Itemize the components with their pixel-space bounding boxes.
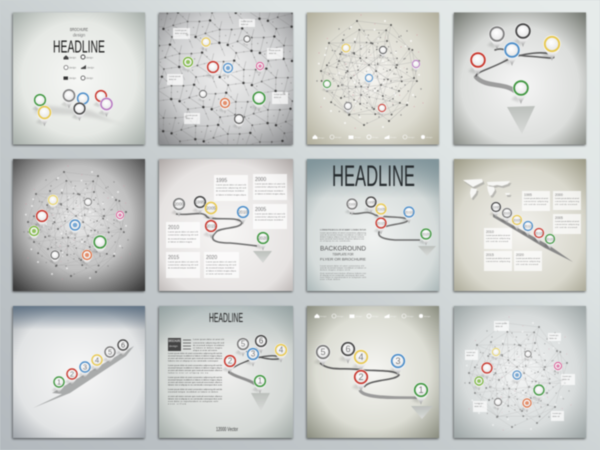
pins: 2005 <box>377 207 385 211</box>
pins: 1995 <box>492 205 500 209</box>
cards: 2020 <box>516 253 524 257</box>
article text: do eiusmod tempor incididunt <box>193 344 224 347</box>
heading: background template for flyer or brochure: FLYER OR BROCHURE <box>320 258 367 262</box>
article text: ut enim ad minim veniam quis nostrud exercitation ullamco <box>168 395 223 398</box>
text block: body: ut aliquip ex ea commodo consequat duis aute <box>320 274 365 277</box>
panel: headline flyer <box>307 159 439 291</box>
ribbon <box>320 363 417 398</box>
text cards <box>167 19 288 124</box>
pins: 2000 <box>174 201 184 207</box>
pins: 2020 <box>258 235 268 241</box>
pins <box>28 194 124 266</box>
pins: 2020 <box>422 232 430 236</box>
icon grid: design <box>69 77 77 80</box>
icon row: design <box>407 316 414 318</box>
network <box>309 13 433 134</box>
text cards: Lorem ips <box>562 376 571 378</box>
numbered pins: 6 <box>259 337 263 346</box>
icon grid: design <box>69 56 77 60</box>
icon row: design <box>335 137 342 139</box>
cards: 2010 <box>486 230 494 234</box>
cards: Lorem ipsum dolor sit amet <box>555 197 579 200</box>
text cards <box>465 321 575 421</box>
pins: 1995 <box>367 200 375 204</box>
cards: 1995 <box>216 178 227 184</box>
article text: Lorem ipsum dolor sit amet consectetur adipiscing elit sed do <box>168 364 223 367</box>
text cards: Lorem ipsum <box>496 323 507 325</box>
pins <box>473 348 562 412</box>
cards: Lorem ipsum dolor sit amet elit <box>206 260 236 264</box>
article text: Lorem ipsum dolor sit amet elit <box>193 338 224 341</box>
text cards: Lorem ips <box>474 403 483 405</box>
panel: light network with cards <box>454 306 586 438</box>
arrow <box>251 393 270 411</box>
arrow <box>507 106 535 134</box>
cards: 2015 <box>168 255 179 261</box>
cards: ut labore et dolore magna aliqua <box>216 194 247 196</box>
numbered pins <box>222 334 288 394</box>
article text: eiusmod tempor incididunt ut labore et dolore magna aliqua <box>168 378 223 382</box>
panel: rising numbered steps <box>13 306 145 438</box>
panel: beige network sphere <box>307 12 439 144</box>
article text: laboris nisi ut aliquip ex ea commodo consequat duis aute <box>168 398 223 400</box>
text: brochure design: design <box>73 32 86 38</box>
pins: 2010 <box>238 209 248 215</box>
pins: 2015 <box>377 221 385 225</box>
text cards: dolor sit <box>550 337 557 340</box>
numbered pins: 4 <box>358 352 364 362</box>
cards: Lorem ipsum dolor sit amet <box>555 220 579 223</box>
text cards: dolor sit <box>241 23 248 26</box>
text block: intro: ut aliquip ex ea commodo <box>320 240 351 242</box>
pins: 2020 <box>546 237 554 241</box>
article text: Lorem ipsum dolor sit amet consectetur adipiscing elit sed do <box>168 388 223 391</box>
article text: irure dolor in reprehenderit in voluptate velit <box>168 400 218 403</box>
cards: 2010 <box>168 225 179 231</box>
cards: do eiusmod tempor incididunt <box>168 266 196 270</box>
cards: elit sed do eiusmod <box>555 226 577 229</box>
text cards: dolor sit <box>269 52 276 55</box>
cards: ut labore et dolore magna aliqua <box>255 192 286 196</box>
pins <box>345 196 432 246</box>
icon row: design <box>426 137 433 139</box>
numbered pins: 3 <box>251 350 255 359</box>
icon row: design <box>320 316 327 318</box>
cards: do eiusmod tempor incididunt <box>216 190 244 192</box>
article text: ut enim ad minim veniam quis nostrud exercitation ullamco <box>168 357 223 360</box>
icon row <box>314 314 431 318</box>
article text: esse cillum <box>168 404 186 406</box>
cards: consectetur adipiscing <box>486 260 510 263</box>
numbered pins: 4 <box>279 346 284 355</box>
text cards: dolor sit <box>552 415 560 418</box>
pins: 2015 <box>206 223 216 229</box>
cards: 2005 <box>255 207 266 213</box>
article text <box>168 338 225 406</box>
text cards: dolor sit <box>274 96 281 99</box>
text cards: Lorem ips <box>552 413 561 415</box>
numbered pins <box>314 341 429 405</box>
text cards: Lorem ips <box>550 335 558 337</box>
pins <box>182 35 266 130</box>
icon grid: design <box>69 66 77 70</box>
cards: consectetur adipiscing elit sed <box>168 264 198 266</box>
panel: numbered pins with ribbon <box>307 306 439 438</box>
cards: consectetur adipiscing elit sed <box>255 186 285 188</box>
text block: body: esse cillum dolore <box>320 279 341 281</box>
cards: consectetur adipiscing <box>555 223 579 226</box>
text block: body: Lorem ipsum dolor sit amet consectetur elit <box>320 264 364 268</box>
text cards: Lorem ipsum <box>269 50 281 52</box>
title: headline: HEADLINE <box>53 37 105 57</box>
footer text: 12000 Vector <box>216 427 238 433</box>
cards: consectetur adipiscing elit sed <box>206 264 236 266</box>
text: brochure design: BROCHURE <box>70 27 88 32</box>
article text: ut labore et dolore magna <box>193 346 223 350</box>
numbered pins: 1 <box>258 377 262 386</box>
cards: do eiusmod tempor incididunt <box>206 266 234 270</box>
icon row: design <box>372 316 379 318</box>
pins: 2000 <box>503 211 511 215</box>
network <box>16 164 140 285</box>
heading: background template for flyer or brochure: BACKGROUND <box>320 246 367 252</box>
text cards: dolor sit <box>186 117 193 120</box>
text cards: dolor sit <box>169 78 176 81</box>
pins <box>468 23 561 104</box>
icon grid: design <box>86 56 94 60</box>
pins: 2015 <box>535 231 543 235</box>
text cards: dolor sit <box>562 378 570 381</box>
cards: Lorem ipsum dolor sit amet <box>524 197 548 200</box>
cards: Lorem ipsum dolor sit amet elit <box>216 184 246 186</box>
cards: consectetur adipiscing <box>555 200 579 203</box>
ribbon <box>476 49 554 92</box>
cards: ut labore et dolore magna aliqua <box>206 270 237 272</box>
numbered pins: 1 <box>418 385 424 395</box>
diagonal ribbon <box>493 214 573 262</box>
cards: elit sed do eiusmod <box>555 203 577 206</box>
title: headline: HEADLINE <box>332 160 415 193</box>
cards: elit sed do eiusmod <box>516 263 538 266</box>
arrow <box>411 406 433 419</box>
numbered pins: 1 <box>57 378 61 387</box>
numbered pins: 2 <box>228 357 232 366</box>
text block: body <box>320 264 367 281</box>
cards: Lorem ipsum dolor sit amet elit <box>255 182 285 186</box>
pins: 2005 <box>513 218 521 222</box>
article text: laboris nisi ut aliquip ex ea commodo consequat <box>168 360 218 362</box>
text cards: Lorem ipsum <box>175 30 187 32</box>
numbered pins: 3 <box>395 356 401 366</box>
cards: consectetur adipiscing <box>524 200 548 203</box>
panel: dense network <box>159 12 293 144</box>
icon row: design <box>354 137 362 139</box>
cards: ut enim ad minim veniam <box>206 272 232 276</box>
text: brochure design <box>70 27 88 38</box>
text block: intro: LOREM IPSUM DOLOR SIT AMET CONSECTETUR <box>320 228 366 232</box>
article text: laboris nisi ut aliquip ex ea commodo consequat duis aute <box>168 384 223 386</box>
text block: body: Quis nostrud exercitation ullamco laboris nisi <box>320 272 367 275</box>
numbered pins: 2 <box>358 372 364 382</box>
icon row: design <box>390 316 397 318</box>
cards: Lorem ipsum dolor sit amet <box>486 257 510 260</box>
cards: 1995 <box>524 193 532 197</box>
text cards: Lorem ipsum <box>274 94 286 96</box>
cards: elit sed do eiusmod <box>486 240 508 243</box>
icon row: design <box>408 137 415 139</box>
cards: elit sed do eiusmod <box>524 203 546 206</box>
text block: intro: quis nostrud exercitation ullamco laboris nisi <box>320 238 365 240</box>
numbered pins: 3 <box>83 363 87 372</box>
pins <box>32 89 113 126</box>
article text: eiusmod tempor incididunt ut labore et dolore <box>168 390 219 394</box>
panel: pins with ribbon and arrow <box>454 12 586 144</box>
text cards: dolor sit <box>496 325 503 328</box>
ribbon <box>176 213 257 246</box>
cards: do eiusmod tempor incididunt <box>168 238 196 240</box>
icon grid: design <box>87 66 95 70</box>
numbered pins <box>52 339 129 394</box>
text cards: Lorem ipsum <box>241 21 253 23</box>
cards: consectetur adipiscing elit sed <box>168 234 198 236</box>
pins: 1995 <box>195 199 205 205</box>
cards: Lorem ipsum dolor sit amet elit <box>168 260 198 264</box>
world map <box>463 179 512 200</box>
cards: 2020 <box>206 255 217 261</box>
text cards: Lorem ipsum <box>186 115 198 117</box>
panel: timeline 1995-2020 <box>159 159 293 291</box>
icon grid: design <box>86 77 94 80</box>
article text: Lorem ipsum dolor sit amet consectetur adipiscing elit sed do <box>168 352 223 355</box>
network <box>457 315 581 436</box>
pins <box>322 43 420 116</box>
heading: background template for flyer or brochure: TEMPLATE FOR <box>332 252 354 256</box>
icon grid <box>64 55 95 80</box>
numbered pins: 5 <box>241 340 246 349</box>
mesh network <box>159 12 293 144</box>
diagonal ribbon <box>33 346 134 408</box>
icon row: design <box>337 316 344 318</box>
article text: laboris nisi ut aliquip ex ea <box>168 372 209 374</box>
map shadow <box>33 105 125 125</box>
numbered pins: 6 <box>345 344 351 354</box>
pins: 2010 <box>405 210 413 214</box>
text block: intro: dolore magna aliqua ut enim ad minim veniam <box>320 236 364 238</box>
cards: do eiusmod tempor incididunt <box>255 218 283 222</box>
icon row: design <box>372 137 379 139</box>
text cards: dolor sit amet <box>175 32 187 35</box>
icon row: design <box>356 316 363 318</box>
article text: ut enim ad minim veniam quis nostrud exercitation ullamco <box>168 381 223 384</box>
cards: 2005 <box>555 216 563 220</box>
pins <box>171 195 270 251</box>
panel: brochure headline with pins <box>13 12 145 144</box>
logo: brochure: BROCHURE <box>168 339 181 343</box>
panel: world map timeline <box>454 159 586 291</box>
numbered pins: 5 <box>320 347 326 357</box>
ribbon <box>350 212 420 240</box>
panel: headline article <box>159 306 293 438</box>
cards <box>166 174 287 278</box>
text block: body: sed do eiusmod tempor incididunt ut labore et <box>320 266 366 270</box>
article text: Lorem ipsum dolor sit amet consectetur adipiscing elit sed do <box>168 376 223 379</box>
article text: consectetur adipiscing elit sed <box>193 342 225 344</box>
icon row: design <box>424 316 431 318</box>
text block: intro: sed do eiusmod tempor incididunt ut labore et <box>320 234 366 236</box>
pins: 2010 <box>524 224 532 228</box>
cards: Lorem ipsum dolor sit amet <box>486 234 510 237</box>
cards: consectetur adipiscing elit sed <box>255 216 285 218</box>
text block: body: dolore magna aliqua enim <box>320 270 350 272</box>
heading: background template for flyer or brochure <box>320 246 367 262</box>
title: headline: HEADLINE <box>209 311 243 325</box>
ribbon <box>229 351 281 386</box>
icon row: design <box>318 138 325 140</box>
article text: aliqua ut enim ad minim <box>193 349 217 352</box>
numbered pins: 6 <box>121 341 125 350</box>
icon row: design <box>390 137 397 139</box>
cards: 2015 <box>486 253 494 257</box>
cards: 2000 <box>255 177 266 183</box>
cards: ut labore et dolore magna <box>168 240 193 244</box>
text cards: Lorem ipsum <box>169 76 181 78</box>
logo: brochure <box>168 338 191 351</box>
arrow <box>253 251 272 263</box>
article text: eiusmod tempor incididunt ut labore et dolore magna aliqua <box>168 354 223 358</box>
cards <box>484 191 581 271</box>
article text: ut enim ad minim veniam quis nostrud exercitation ullamco <box>168 369 223 372</box>
cards: Lorem ipsum dolor sit amet <box>516 257 540 260</box>
pins: 2000 <box>348 202 356 206</box>
cards: consectetur adipiscing elit sed <box>216 186 246 190</box>
numbered pins: 4 <box>95 356 99 365</box>
text cards: Lorem ips <box>466 352 475 354</box>
cards: do eiusmod tempor incididunt <box>255 190 283 192</box>
article text: eiusmod tempor incididunt ut labore et dolore magna aliqua <box>168 366 223 370</box>
cards: Lorem ipsum dolor sit amet elit <box>255 212 285 216</box>
numbered pins: 2 <box>70 370 74 379</box>
numbered pins: 5 <box>108 348 112 357</box>
logo: brochure: design <box>169 344 178 348</box>
text block: body: irure dolor in reprehenderit in voluptate velit <box>320 276 366 279</box>
pins: 2005 <box>206 206 216 211</box>
cards: Lorem ipsum dolor sit amet elit <box>168 230 198 234</box>
text block: intro <box>320 228 366 242</box>
pins <box>490 202 556 250</box>
arrow <box>418 246 436 256</box>
text block: intro: Lorem ipsum dolor sit amet consectetur adipiscing <box>320 232 366 234</box>
cards: consectetur adipiscing <box>516 260 540 263</box>
cards: consectetur adipiscing <box>486 237 510 240</box>
text cards: dolor sit <box>474 405 482 408</box>
icon row <box>312 135 433 140</box>
panel: dark network <box>13 159 145 291</box>
text cards: dolor sit <box>466 354 474 357</box>
cards: 2000 <box>555 193 563 197</box>
